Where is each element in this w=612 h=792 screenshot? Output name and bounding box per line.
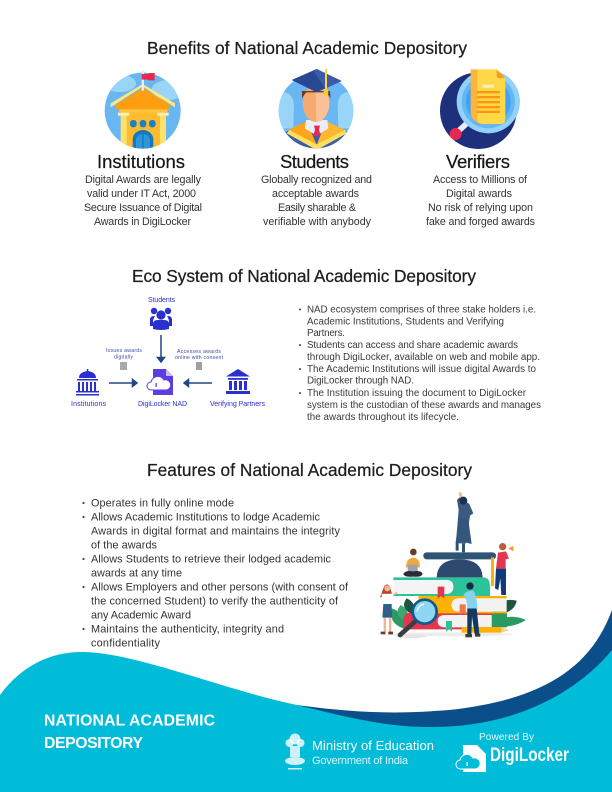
text block: institutions benefits [84, 174, 202, 228]
panel: verifiers [426, 69, 535, 228]
text: digilocker wordmark: DigiLocker [490, 745, 569, 766]
icon: digilocker document cloud [456, 745, 486, 772]
footer heading: national academic depository: DEPOSITORY [44, 735, 143, 752]
illustration: people on books with graduation cap [380, 492, 526, 638]
text block: students benefits [261, 174, 372, 228]
text block: features bullets: Operates in fully online mode [91, 498, 234, 510]
text block: institutions benefits: Secure Issuance of Digital [84, 202, 202, 214]
title: eco system: Eco System of National Academic Depository [132, 266, 476, 286]
footer heading: national academic depository: NATIONAL ACADEMIC [44, 713, 215, 730]
text block: institutions benefits: Awards in DigiLocker [94, 216, 191, 228]
text block: features bullets: confidentiality [91, 638, 161, 650]
heading: institutions: Institutions [97, 151, 185, 172]
text block: institutions benefits: valid under IT Act, 2000 [87, 188, 196, 200]
text block: verifiers benefits: Access to Millions of [433, 174, 527, 186]
text block: ecosystem bullets: the awards throughout its lifecycle. [307, 412, 459, 423]
arrow: institutions to digilocker [109, 380, 137, 386]
text block: students benefits: acceptable awards [272, 188, 359, 200]
text block: students benefits: Globally recognized and [261, 174, 372, 186]
text block: features bullets: Awards in digital format and maintains the integrity [91, 526, 341, 538]
label: accesses awards: Accesses awards [177, 349, 221, 355]
text block: features bullets: awards at any time [91, 568, 182, 580]
text block: ecosystem bullets: system is the custodian of these awards and manages [307, 400, 541, 411]
icon: digilocker document with cloud [147, 369, 173, 395]
text block: students benefits: Easily sharable & [278, 202, 356, 214]
footer: wave background [0, 610, 612, 792]
text block: ecosystem bullets: through DigiLocker, available on web and mobile app. [307, 352, 540, 363]
text block: verifiers benefits: No risk of relying upon [428, 202, 533, 214]
text block: features bullets: Maintains the authenticity, integrity and [91, 624, 284, 636]
label: issues awards digitally: digitally [114, 354, 133, 360]
logo: powered by digilocker [456, 732, 569, 772]
text block: features bullets: Allows Students to retrieve their lodged academic [91, 554, 332, 566]
icon: institution building [104, 70, 185, 150]
heading: students: Students [280, 151, 349, 172]
text block: features bullets: of the awards [91, 540, 158, 552]
label: issues awards digitally: Issues awards [106, 348, 142, 354]
arrow: students to digilocker [158, 335, 164, 362]
text block: institutions benefits: Digital Awards are legally [85, 174, 202, 186]
label: accesses awards [175, 349, 224, 361]
chart: ecosystem flow diagram [71, 297, 266, 408]
text block: ecosystem bullets: The Academic Institutions will issue digital Awards to [307, 364, 537, 375]
text block: features bullets: Allows Employers and other persons (with consent of [91, 582, 349, 594]
icon: national emblem [285, 734, 305, 770]
text block: ecosystem bullets: Students can access and share academic awards [307, 340, 518, 351]
text block: verifiers benefits: fake and forged awards [426, 216, 535, 228]
icon: small document right [196, 362, 202, 370]
panel: students [261, 69, 372, 228]
heading: verifiers: Verifiers [446, 151, 510, 172]
text: ministry name [312, 738, 434, 767]
text block: verifiers benefits: Digital awards [446, 188, 512, 200]
icon: graduate student [278, 69, 353, 152]
text block: verifiers benefits [426, 174, 535, 228]
text block: ecosystem bullets: The Institution issuing the document to DigiLocker [307, 388, 527, 399]
label: digilocker nad: DigiLocker NAD [138, 401, 187, 408]
text block: ecosystem bullets [299, 304, 541, 423]
panel: institutions [84, 70, 202, 228]
text block: ecosystem bullets: DigiLocker through NAD. [307, 376, 414, 387]
icon: institution dome [76, 369, 99, 396]
text block: ecosystem bullets: Partners. [307, 328, 345, 339]
icon: small document left [120, 362, 127, 370]
title: features: Features of National Academic Depository [147, 460, 472, 480]
text block: ecosystem bullets: NAD ecosystem comprises of three stake holders i.e. [307, 304, 536, 316]
logo: ministry of education [285, 734, 434, 770]
label: accesses awards: online with consent [175, 355, 224, 361]
text: powered by: Powered By [479, 732, 534, 743]
label: institutions: Institutions [71, 401, 106, 408]
text block: features bullets [82, 498, 349, 650]
icon: students group [150, 308, 172, 330]
footer heading: national academic depository [44, 713, 215, 752]
text block: features bullets: the concerned Student) to verify the authenticity of [91, 596, 339, 608]
label: issues awards digitally [106, 348, 142, 360]
text block: features bullets: Allows Academic Institutions to lodge Academic [91, 512, 321, 524]
label: verifying partners: Verifying Partners [210, 401, 266, 408]
text block: students benefits: verifiable with anybody [263, 216, 372, 228]
text block: features bullets: any Academic Award [91, 610, 191, 622]
label: students: Students [148, 297, 176, 304]
arrow: verifying partners to digilocker [184, 380, 212, 386]
icon: magnifier over document [440, 69, 520, 149]
text: ministry name: Government of India [312, 755, 409, 767]
text block: ecosystem bullets: Academic Institutions, Students and Verifying [307, 316, 504, 327]
text: ministry name: Ministry of Education [312, 738, 434, 753]
icon: bank building [226, 369, 250, 394]
title: benefits: Benefits of National Academic Depository [147, 38, 467, 58]
